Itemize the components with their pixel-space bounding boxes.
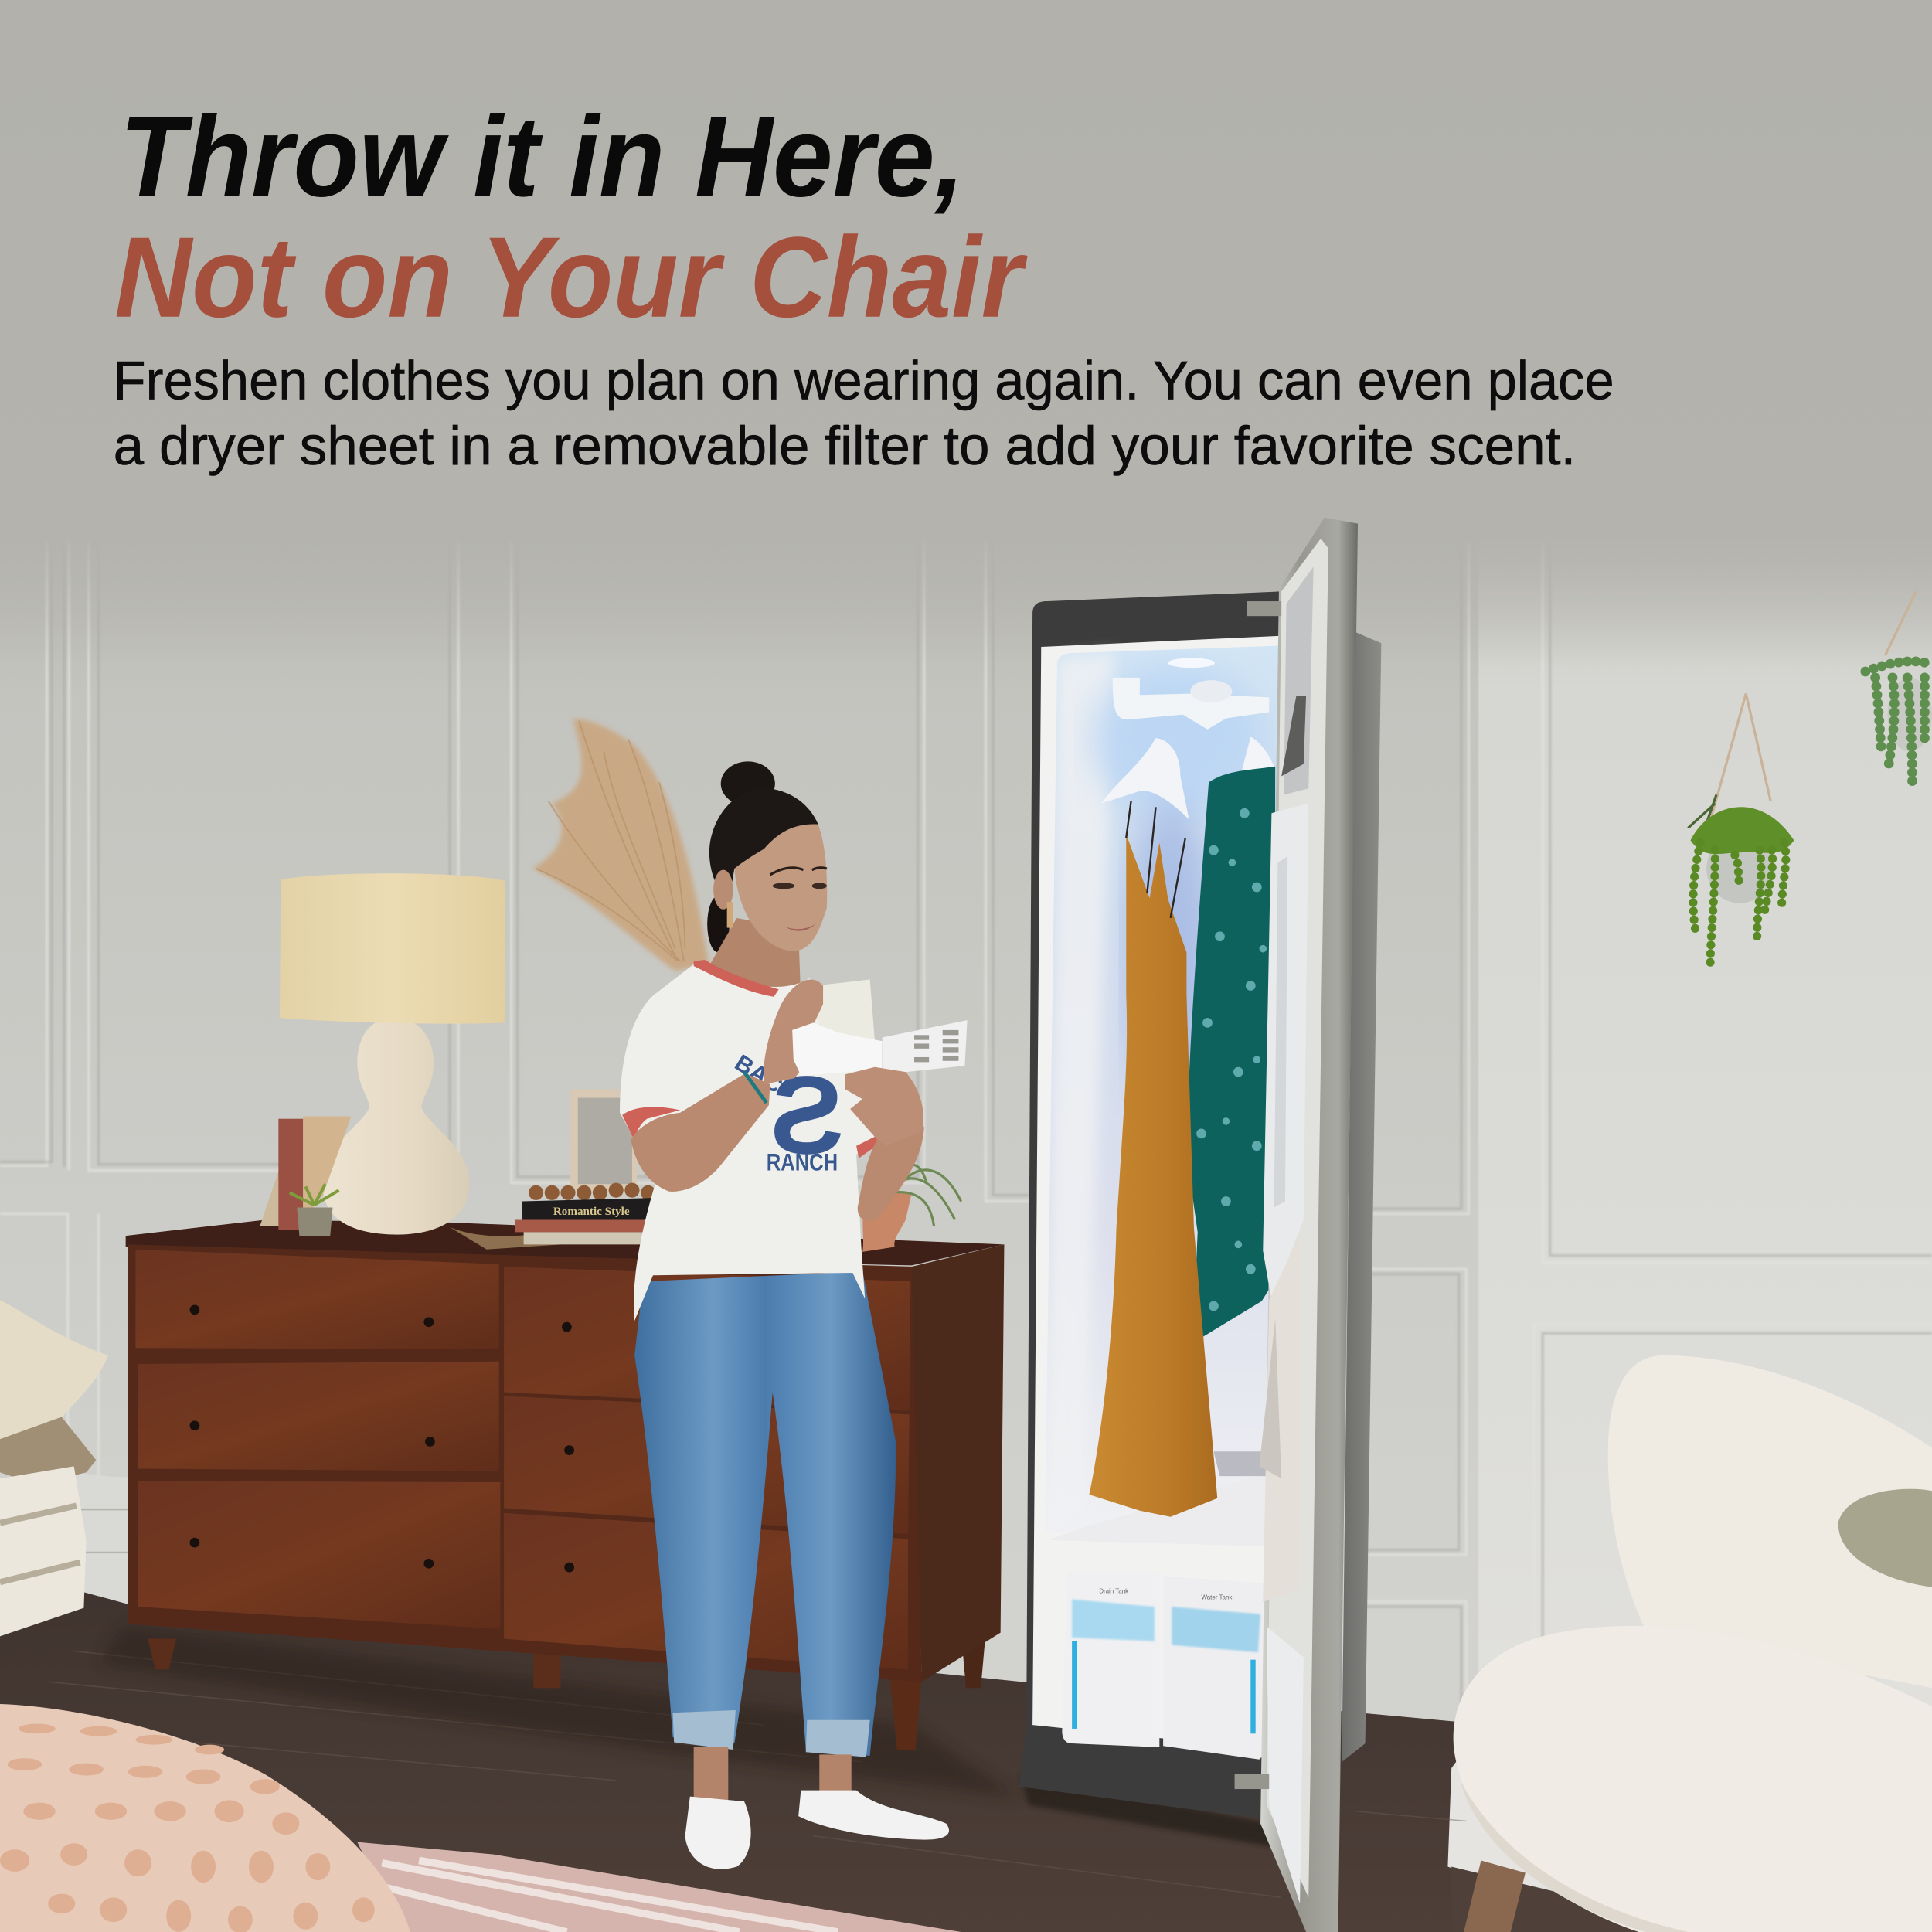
heading: Throw it in Here, bbox=[120, 94, 964, 221]
picture frame bbox=[570, 1089, 637, 1190]
hangers bbox=[1101, 736, 1275, 819]
wall moldings bbox=[0, 543, 1932, 1725]
t-shirt bbox=[620, 962, 889, 1321]
chair leg bbox=[1464, 1861, 1526, 1932]
door lower pockets bbox=[1263, 1232, 1301, 1602]
heading bbox=[114, 94, 1028, 342]
ceiling light bbox=[1168, 658, 1215, 668]
shirt collar and sleeve trim bbox=[622, 960, 889, 1158]
chamber bbox=[1045, 645, 1279, 1540]
dress straps bbox=[1126, 801, 1185, 918]
wooden beads and book stack: Romantic Style bbox=[553, 1206, 630, 1218]
dresser shadow on floor bbox=[99, 1627, 1022, 1799]
shirt print: RANCH bbox=[767, 1148, 838, 1176]
neck bbox=[705, 918, 801, 1001]
dresser drawers bbox=[135, 1250, 910, 1669]
woven pouf bbox=[0, 1300, 108, 1636]
ankles bbox=[694, 1747, 852, 1804]
air dresser cabinet side bbox=[1342, 632, 1381, 1762]
jeans cuffs bbox=[673, 1710, 870, 1757]
description text: a dryer sheet in a removable filter to add your favorite scent. bbox=[114, 415, 1576, 476]
steam module bbox=[1263, 804, 1308, 1301]
drawers: Water Tank bbox=[1202, 1594, 1232, 1601]
socks bbox=[685, 1791, 949, 1869]
jeans bbox=[634, 1271, 896, 1756]
upper right plant bbox=[1866, 591, 1932, 788]
cabinet shadow on floor bbox=[1020, 1774, 1281, 1849]
shirt print: BAC bbox=[730, 1050, 787, 1099]
drawer knobs bbox=[190, 1304, 574, 1572]
drawers: Drain Tank bbox=[1099, 1588, 1128, 1595]
blue glow bbox=[1090, 665, 1263, 813]
heading: Not on Your Chair bbox=[114, 214, 1028, 342]
drawers bbox=[1062, 1572, 1267, 1760]
terracotta pot with plant bbox=[862, 1165, 961, 1252]
shirt print: S bbox=[770, 1053, 844, 1177]
right hand bbox=[845, 1067, 923, 1146]
pampas grass bbox=[532, 719, 709, 971]
striped rug bbox=[357, 1842, 961, 1932]
floor bbox=[0, 1587, 1725, 1932]
chair back opening bbox=[1838, 1489, 1932, 1587]
hair bbox=[709, 788, 818, 900]
face features bbox=[770, 868, 827, 931]
shirt print bbox=[730, 1050, 844, 1177]
tufted pillow bbox=[0, 1704, 410, 1932]
removable filter bbox=[792, 1020, 968, 1076]
description text: Freshen clothes you plan on wearing again. You can even place bbox=[114, 350, 1614, 411]
description text bbox=[114, 350, 1614, 476]
head bbox=[734, 824, 827, 951]
baseboard bbox=[74, 1472, 128, 1604]
dryer sheet bbox=[815, 980, 875, 1041]
chamber floor bbox=[1047, 1472, 1269, 1546]
woman bbox=[620, 761, 968, 1869]
books and small plant on dresser bbox=[260, 1117, 351, 1236]
ear and earring bbox=[713, 870, 733, 928]
wooden beads and book stack bbox=[450, 1183, 665, 1250]
dresser bbox=[126, 1219, 1004, 1750]
door hook and tag bbox=[1281, 696, 1306, 776]
boucle chair bbox=[1454, 1355, 1932, 1932]
air dresser cabinet bbox=[1019, 591, 1281, 1821]
low bun bbox=[707, 896, 730, 952]
open door bbox=[1235, 518, 1358, 1932]
table lamp bbox=[280, 873, 505, 1235]
hanging plant bbox=[1688, 694, 1794, 968]
bracelet bbox=[744, 1072, 767, 1103]
chair back bbox=[1608, 1355, 1932, 1688]
fade of wall moldings into top band bbox=[0, 481, 1932, 665]
door hinges bbox=[1247, 601, 1281, 616]
hair bun bbox=[721, 761, 775, 806]
orange dress bbox=[1089, 834, 1217, 1517]
hanger rail bbox=[1113, 678, 1269, 730]
chair seat bbox=[1454, 1626, 1932, 1932]
arms bbox=[631, 1073, 924, 1221]
teal dress bbox=[1186, 767, 1275, 1343]
left hand bbox=[764, 980, 823, 1084]
